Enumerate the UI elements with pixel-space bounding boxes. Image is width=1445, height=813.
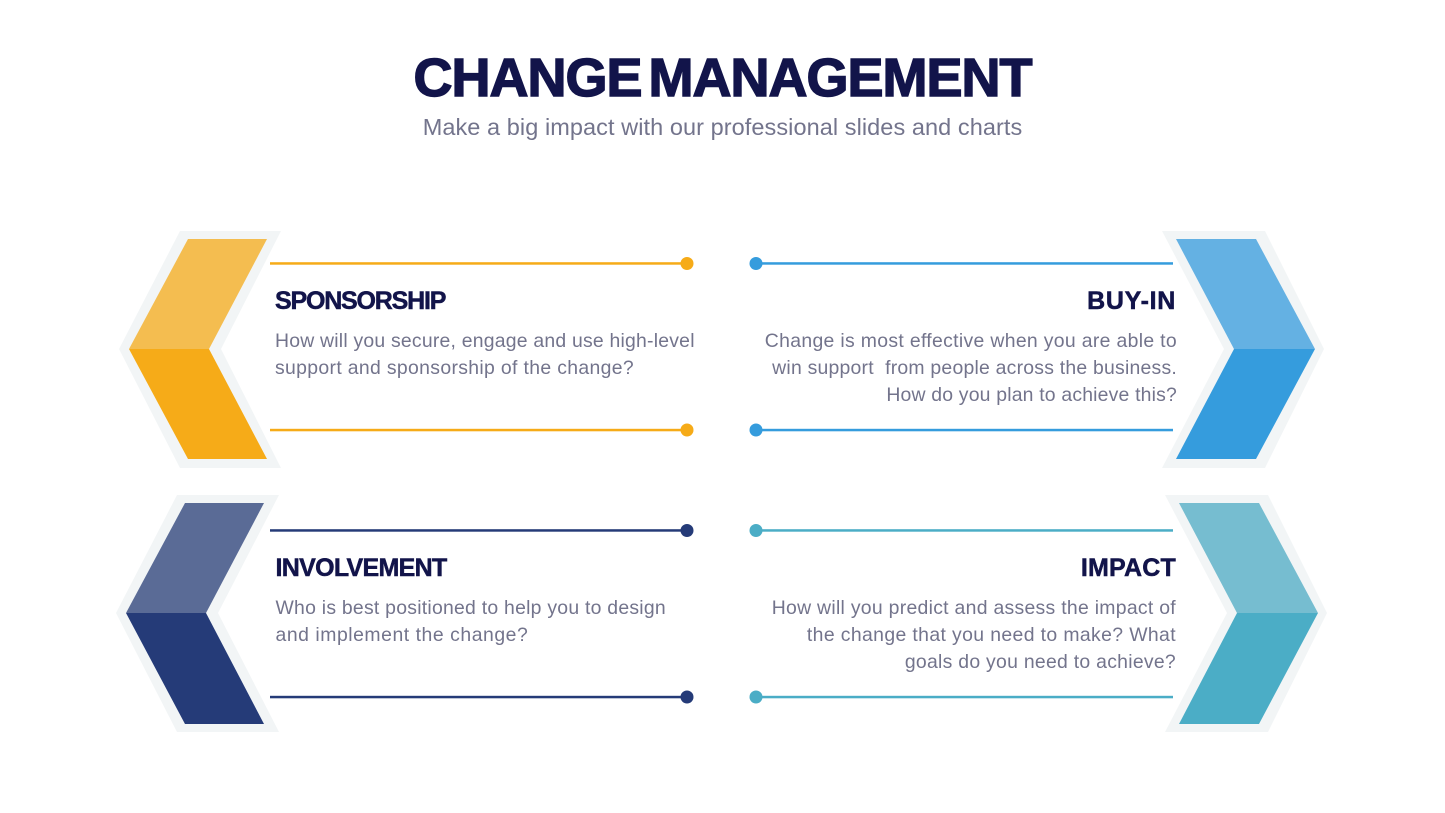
- heading: involvement: INVOLVEMENT: [276, 554, 447, 582]
- lines: sponsorship: [270, 257, 694, 436]
- chevron: sponsorship: [119, 231, 281, 468]
- text: buy-in: win support from people across the business.: [772, 357, 1177, 379]
- text: sponsorship: [275, 330, 695, 379]
- text: buy-in: [765, 330, 1177, 406]
- text: impact: [772, 597, 1176, 673]
- heading: impact: IMPACT: [1081, 554, 1176, 582]
- text: sponsorship: support and sponsorship of the change?: [275, 357, 634, 379]
- lines: buy-in: [750, 257, 1173, 436]
- text: involvement: and implement the change?: [276, 624, 528, 646]
- chevron: involvement: [116, 495, 279, 732]
- text: involvement: Who is best positioned to help you to design: [276, 597, 666, 619]
- lines: involvement: [270, 524, 694, 704]
- chevron: impact: [1165, 495, 1327, 732]
- text: buy-in: How do you plan to achieve this?: [886, 384, 1177, 406]
- text: involvement: [276, 597, 666, 646]
- subtitle: Make a big impact with our professional slides and charts: [423, 114, 1022, 140]
- text: impact: How will you predict and assess the impact of: [772, 597, 1176, 619]
- text: impact: goals do you need to achieve?: [905, 651, 1176, 673]
- title: CHANGE MANAGEMENT: [414, 48, 1032, 108]
- heading: sponsorship: SPONSORSHIP: [275, 287, 445, 315]
- chevron: buy-in: [1162, 231, 1324, 468]
- text: sponsorship: How will you secure, engage and use high-level: [275, 330, 695, 352]
- text: buy-in: Change is most effective when you are able to: [765, 330, 1177, 352]
- heading: buy-in: BUY-IN: [1087, 287, 1176, 315]
- text: impact: the change that you need to make? What: [807, 624, 1176, 646]
- lines: impact: [750, 524, 1173, 704]
